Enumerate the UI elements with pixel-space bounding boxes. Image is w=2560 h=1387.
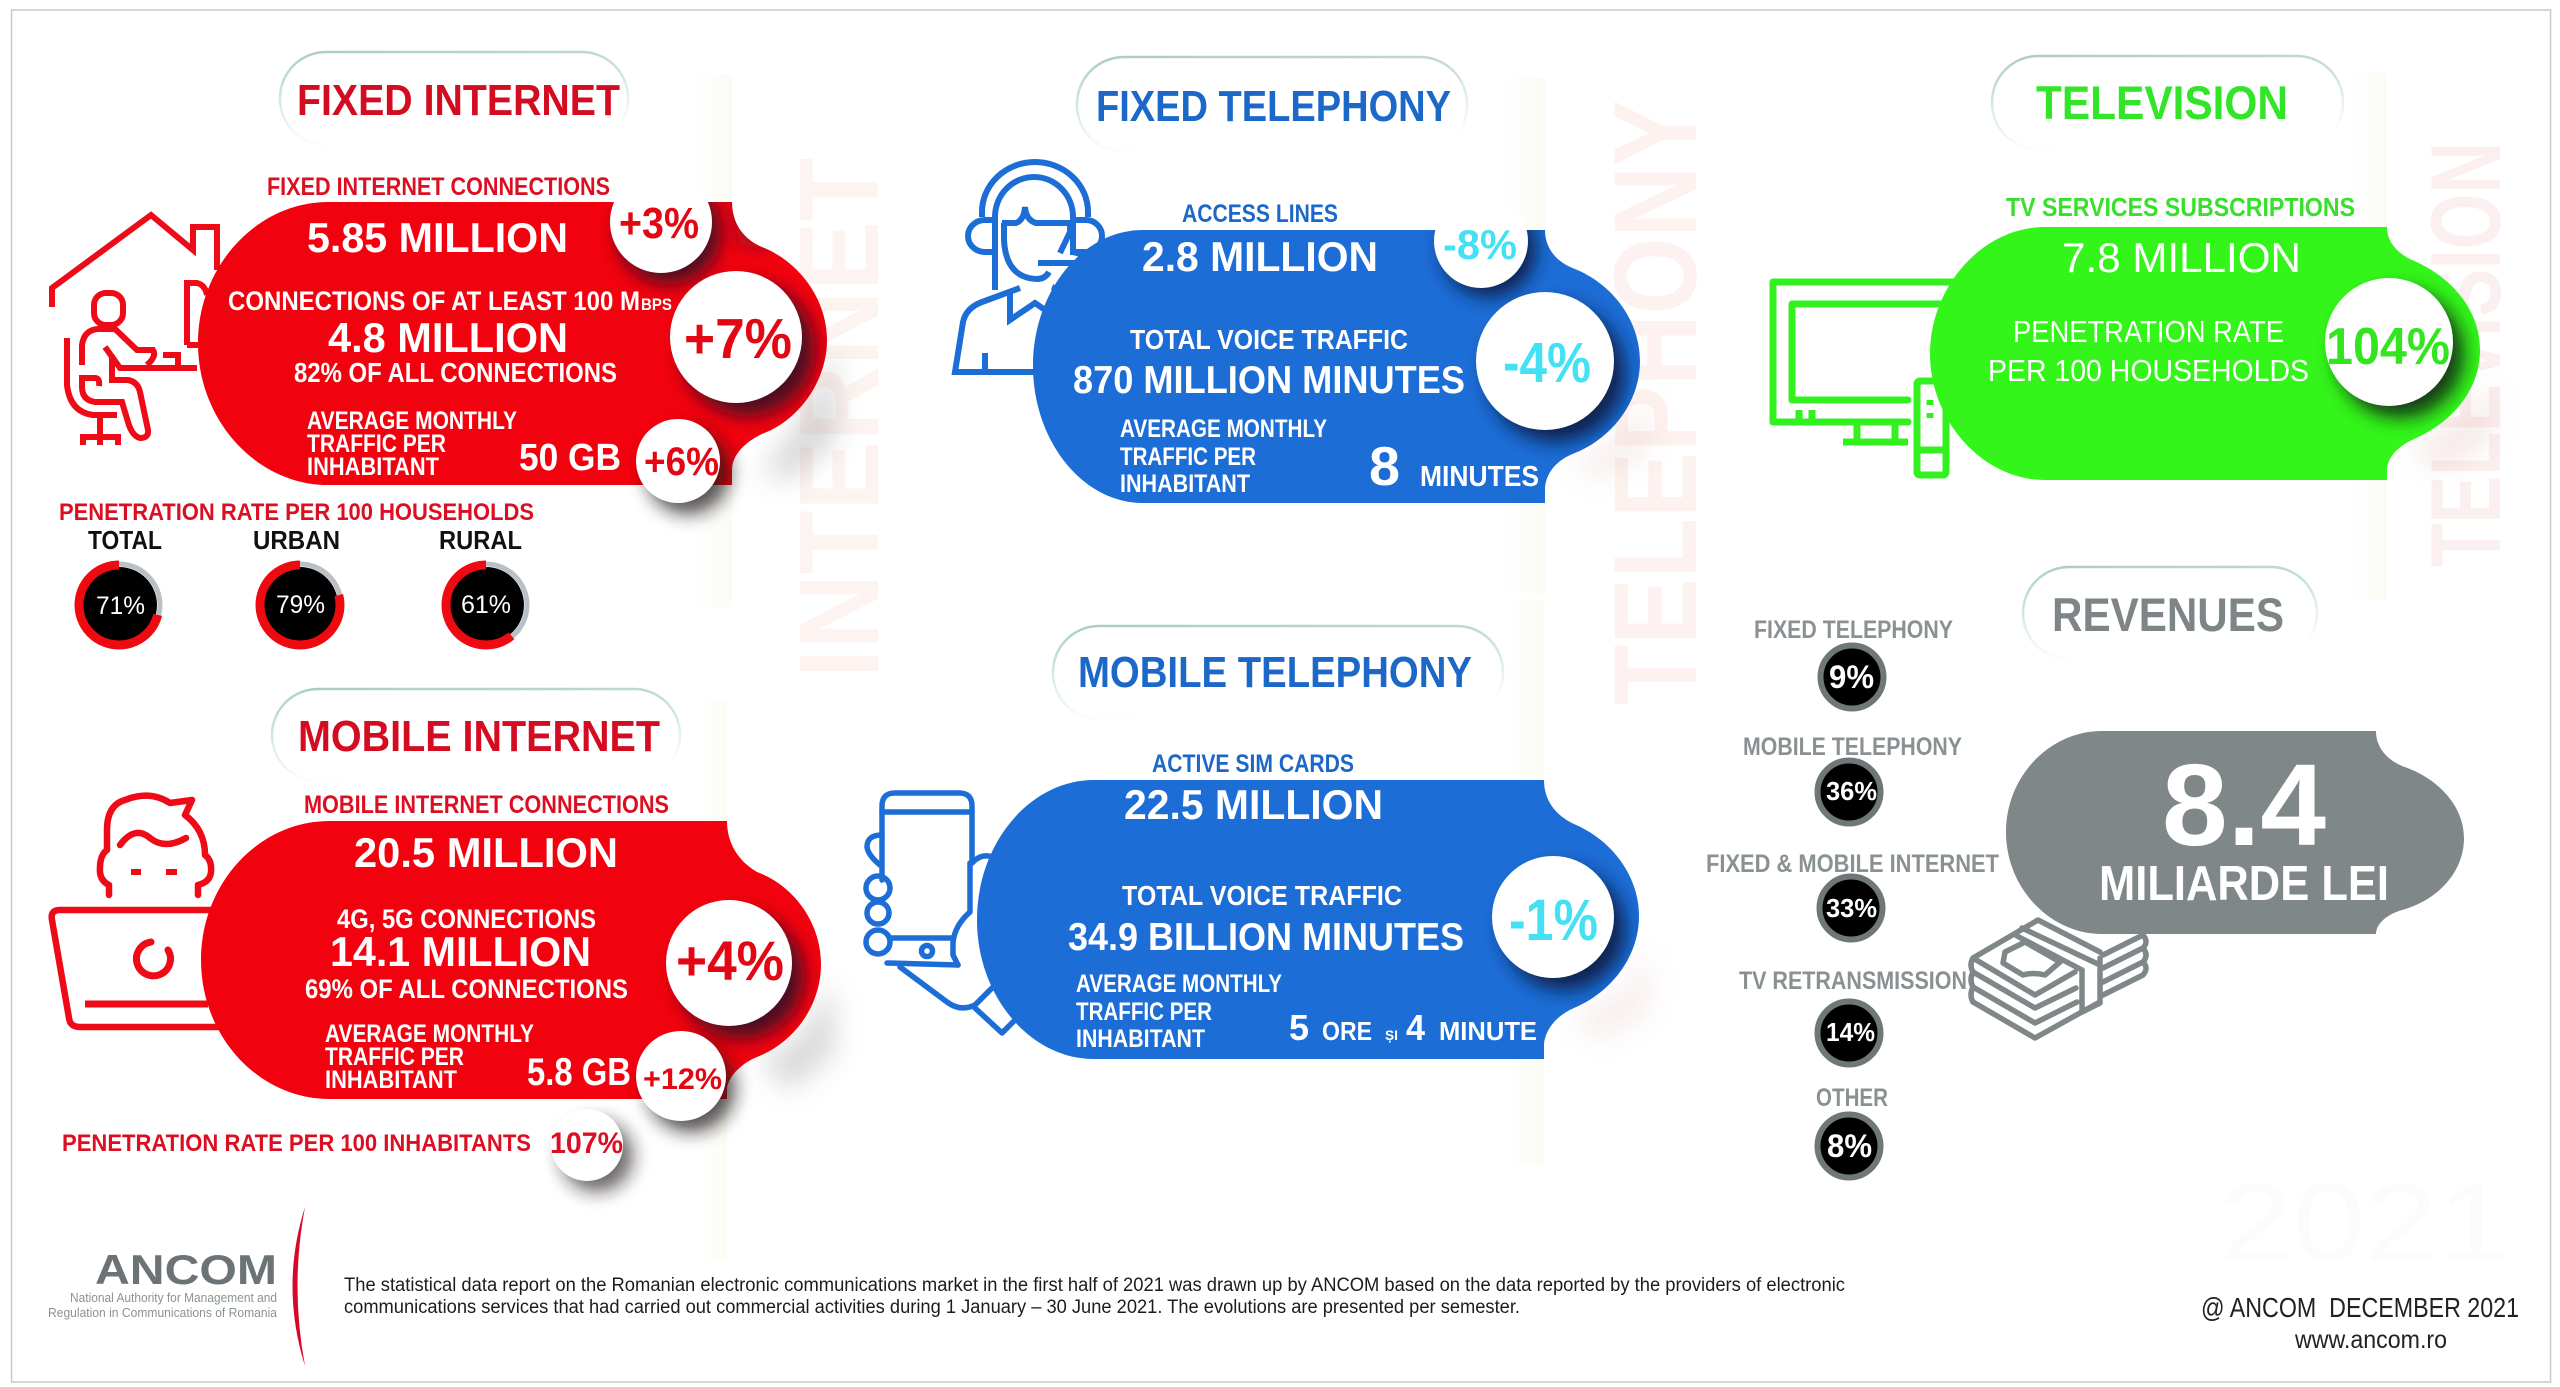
donut: urban 79%: URBAN	[253, 525, 340, 555]
value: 5 hours and 4 minutes: ȘI	[1385, 1027, 1398, 1043]
icon: person working at home	[52, 215, 217, 445]
text: connections of at least 100 Mbps: BPS	[641, 295, 672, 314]
badge: -1%: -1%	[1509, 888, 1598, 953]
icon: hand holding phone	[866, 793, 1017, 1033]
badge: -8%: -8%	[1443, 221, 1517, 268]
text: total voice traffic: TOTAL VOICE TRAFFIC	[1122, 880, 1402, 911]
badge: +4%: +4%	[676, 929, 784, 992]
badge: +6%: +6%	[644, 440, 719, 484]
logo: ANCOM: National Authority for Management and	[70, 1290, 277, 1305]
donut: urban 79%	[253, 525, 341, 646]
value: 8 minutes	[1369, 435, 1539, 497]
share: fixed and mobile internet 33%	[1706, 850, 1999, 940]
text: methodology note: communications services that had carried out commercial activities during 1 January – 30 June 2021. The evolutions are presented per semester.	[344, 1297, 1520, 1318]
icon: television and remote	[1773, 282, 1960, 475]
panel: mobile telephony	[866, 626, 1650, 1059]
text: methodology note	[344, 1275, 1845, 1318]
donut: rural 61%	[439, 525, 527, 646]
badge: +4%	[666, 900, 792, 1026]
share: other 8%: OTHER	[1816, 1084, 1888, 1112]
heading: mobile telephony	[1053, 626, 1503, 719]
text: connections of at least 100 Mbps: CONNECTIONS OF AT LEAST 100 M	[228, 286, 640, 316]
text: average monthly traffic: AVERAGE MONTHLY	[1120, 415, 1327, 443]
share: fixed and mobile internet 33%: 33%	[1826, 893, 1877, 923]
heading: fixed internet: FIXED INTERNET	[297, 76, 620, 125]
text: penetration rate per 100 households	[1988, 314, 2309, 388]
value: 14.1 million: 14.1 MILLION	[330, 928, 591, 975]
value: 5 hours and 4 minutes	[1289, 1007, 1537, 1048]
value: 5 hours and 4 minutes: 4	[1406, 1007, 1425, 1048]
text: average monthly traffic: TRAFFIC PER	[307, 430, 446, 458]
text: copyright and website: www.ancom.ro	[2294, 1326, 2447, 1354]
badge: +12%	[636, 1031, 726, 1121]
text: share of all connections: 69% OF ALL CONNECTIONS	[305, 974, 628, 1004]
text: penetration rate heading: PENETRATION RATE PER 100 HOUSEHOLDS	[59, 499, 534, 526]
value: 5 hours and 4 minutes: 5	[1289, 1007, 1309, 1048]
share: tv retransmission 14%: 14%	[1826, 1017, 1875, 1047]
panel: fixed telephony	[955, 57, 1650, 503]
text: fixed internet connections: FIXED INTERNET CONNECTIONS	[267, 173, 610, 201]
panel: fixed internet	[52, 52, 835, 646]
heading: television	[1992, 56, 2343, 149]
badge: -4%	[1476, 292, 1614, 430]
value: 5.8 GB: 5.8 GB	[527, 1051, 631, 1094]
value: 5.85 million: 5.85 MILLION	[307, 214, 568, 261]
text: penetration rate per 100 households: PER 100 HOUSEHOLDS	[1988, 353, 2309, 388]
value: 2.8 million: 2.8 MILLION	[1142, 233, 1378, 280]
heading: mobile telephony: MOBILE TELEPHONY	[1078, 648, 1472, 697]
value: 4.8 million: 4.8 MILLION	[328, 314, 568, 361]
text: average monthly traffic	[1076, 970, 1282, 1053]
heading: mobile internet: MOBILE INTERNET	[298, 712, 660, 761]
value: 5 hours and 4 minutes: MINUTE	[1439, 1016, 1537, 1046]
background watermark words and bands: TELEPHONY	[1590, 100, 1722, 705]
share: fixed telephony 9%: FIXED TELEPHONY	[1754, 616, 1953, 644]
share: other 8%	[1816, 1084, 1888, 1178]
logo: ANCOM: ANCOM	[95, 1246, 277, 1293]
heading: fixed telephony	[1077, 57, 1467, 152]
donut: total 71%: 71%	[96, 592, 145, 620]
value: 7.8 million: 7.8 MILLION	[2062, 234, 2301, 281]
text: penetration rate per 100 households: PENETRATION RATE	[2013, 314, 2284, 349]
red data shape	[198, 202, 835, 485]
text: average monthly traffic: TRAFFIC PER	[325, 1043, 464, 1071]
donut: total 71%	[78, 525, 162, 646]
text: methodology note: The statistical data report on the Romanian electronic communications market in the first half of 2021 was drawn up by ANCOM based on the data reported by the providers of electronic	[344, 1275, 1845, 1296]
shadows under badges	[1442, 203, 1625, 442]
text: active sim cards: ACTIVE SIM CARDS	[1152, 750, 1354, 778]
value: 8.4: 8.4	[2162, 740, 2326, 870]
icon: stack of banknotes	[1971, 920, 2146, 1038]
shadows under badges	[617, 180, 815, 416]
badge: +3%: +3%	[619, 199, 699, 248]
logo: ANCOM	[48, 1207, 305, 1366]
share: mobile telephony 36%: MOBILE TELEPHONY	[1743, 733, 1962, 761]
share: tv retransmission 14%	[1739, 967, 1967, 1064]
share: fixed telephony 9%	[1754, 616, 1953, 708]
value: 22.5 million: 22.5 MILLION	[1124, 781, 1383, 828]
text: average monthly traffic: INHABITANT	[1076, 1025, 1205, 1053]
value: 34.9 billion minutes: 34.9 BILLION MINUTES	[1068, 916, 1464, 959]
donut: rural 61%: RURAL	[439, 525, 522, 555]
badge: 104%	[2325, 278, 2453, 406]
blue data shape	[977, 780, 1650, 1059]
text: average monthly traffic: AVERAGE MONTHLY	[1076, 970, 1282, 998]
heading: revenues	[2023, 567, 2317, 659]
heading: fixed internet	[280, 52, 628, 145]
badge: penetration 107%	[550, 1109, 623, 1181]
heading: mobile internet	[272, 689, 680, 781]
text: access lines: ACCESS LINES	[1182, 200, 1338, 228]
panel: mobile internet	[52, 689, 835, 1192]
share: other 8%: 8%	[1827, 1128, 1872, 1164]
green data shape	[1930, 227, 2490, 480]
text: average monthly traffic: AVERAGE MONTHLY	[325, 1020, 534, 1048]
share: fixed and mobile internet 33%: FIXED & MOBILE INTERNET	[1706, 850, 1999, 878]
heading: revenues: REVENUES	[2052, 588, 2284, 641]
value: 8 minutes: 8	[1369, 435, 1400, 497]
donut: urban 79%: 79%	[276, 591, 325, 619]
badge: penetration 107%: 107%	[550, 1127, 623, 1160]
icon: person with laptop	[52, 796, 218, 1027]
panel: television	[1773, 56, 2490, 480]
shadow under badge	[2336, 290, 2464, 418]
background watermark words and bands: INTERNET	[776, 158, 902, 678]
badge: +7%	[670, 271, 802, 403]
heading: television: TELEVISION	[2036, 76, 2288, 129]
text: average monthly traffic: INHABITANT	[307, 453, 439, 481]
shadows under badges	[678, 913, 804, 1039]
badge: +3%	[610, 171, 712, 273]
text: mobile internet connections: MOBILE INTERNET CONNECTIONS	[304, 791, 669, 819]
badge: -4%: -4%	[1503, 331, 1591, 395]
shadow under badge	[1503, 868, 1625, 990]
share: mobile telephony 36%	[1743, 733, 1962, 824]
background watermark words and bands	[695, 73, 2521, 1284]
background watermark words and bands: 2021	[2220, 1161, 2510, 1284]
value: 50 GB: 50 GB	[519, 437, 621, 479]
text: miliarde lei: MILIARDE LEI	[2099, 857, 2389, 911]
share: fixed telephony 9%: 9%	[1829, 659, 1874, 695]
text: average monthly traffic: INHABITANT	[325, 1066, 457, 1094]
text: average monthly traffic	[1120, 415, 1327, 498]
logo: ANCOM: Regulation in Communications of Romania	[48, 1305, 278, 1320]
share: tv retransmission 14%: TV RETRANSMISSION	[1739, 967, 1967, 995]
icon: call centre operator	[955, 162, 1102, 372]
value: 5 hours and 4 minutes: ORE	[1322, 1016, 1372, 1046]
text: average monthly traffic: TRAFFIC PER	[1120, 443, 1256, 471]
badge: +7%: +7%	[684, 307, 792, 371]
badge: +12%: +12%	[643, 1063, 722, 1096]
badge: -1%	[1492, 856, 1614, 978]
value: 870 million minutes: 870 MILLION MINUTES	[1073, 359, 1465, 402]
text: average monthly traffic: TRAFFIC PER	[1076, 998, 1212, 1026]
text: copyright and website	[2201, 1292, 2519, 1354]
text: average monthly traffic: AVERAGE MONTHLY	[307, 407, 517, 435]
text: share of all connections: 82% OF ALL CONNECTIONS	[294, 357, 617, 388]
red data shape	[201, 821, 835, 1099]
grey data shape	[2006, 731, 2464, 934]
text: average monthly traffic	[307, 407, 517, 481]
donut: rural 61%: 61%	[461, 591, 511, 619]
text: total voice traffic: TOTAL VOICE TRAFFIC	[1130, 324, 1408, 355]
donut: total 71%: TOTAL	[88, 525, 162, 555]
badge: +6%	[636, 419, 720, 503]
badge: -8%	[1434, 194, 1528, 288]
badge: 104%: 104%	[2326, 318, 2450, 376]
text: average monthly traffic: INHABITANT	[1120, 470, 1250, 498]
blue data shape	[1033, 230, 1650, 503]
text: 4G, 5G connections: 4G, 5G CONNECTIONS	[337, 904, 596, 934]
panel: revenues	[1706, 567, 2464, 1178]
text: penetration per 100 inhabitants: PENETRATION RATE PER 100 INHABITANTS	[62, 1130, 531, 1157]
text: tv services subscriptions: TV SERVICES SUBSCRIPTIONS	[2006, 192, 2355, 222]
heading: fixed telephony: FIXED TELEPHONY	[1096, 82, 1451, 131]
value: 8 minutes: MINUTES	[1420, 461, 1539, 493]
text: average monthly traffic	[325, 1020, 534, 1094]
value: 20.5 million: 20.5 MILLION	[354, 829, 618, 876]
share: mobile telephony 36%: 36%	[1826, 776, 1877, 806]
